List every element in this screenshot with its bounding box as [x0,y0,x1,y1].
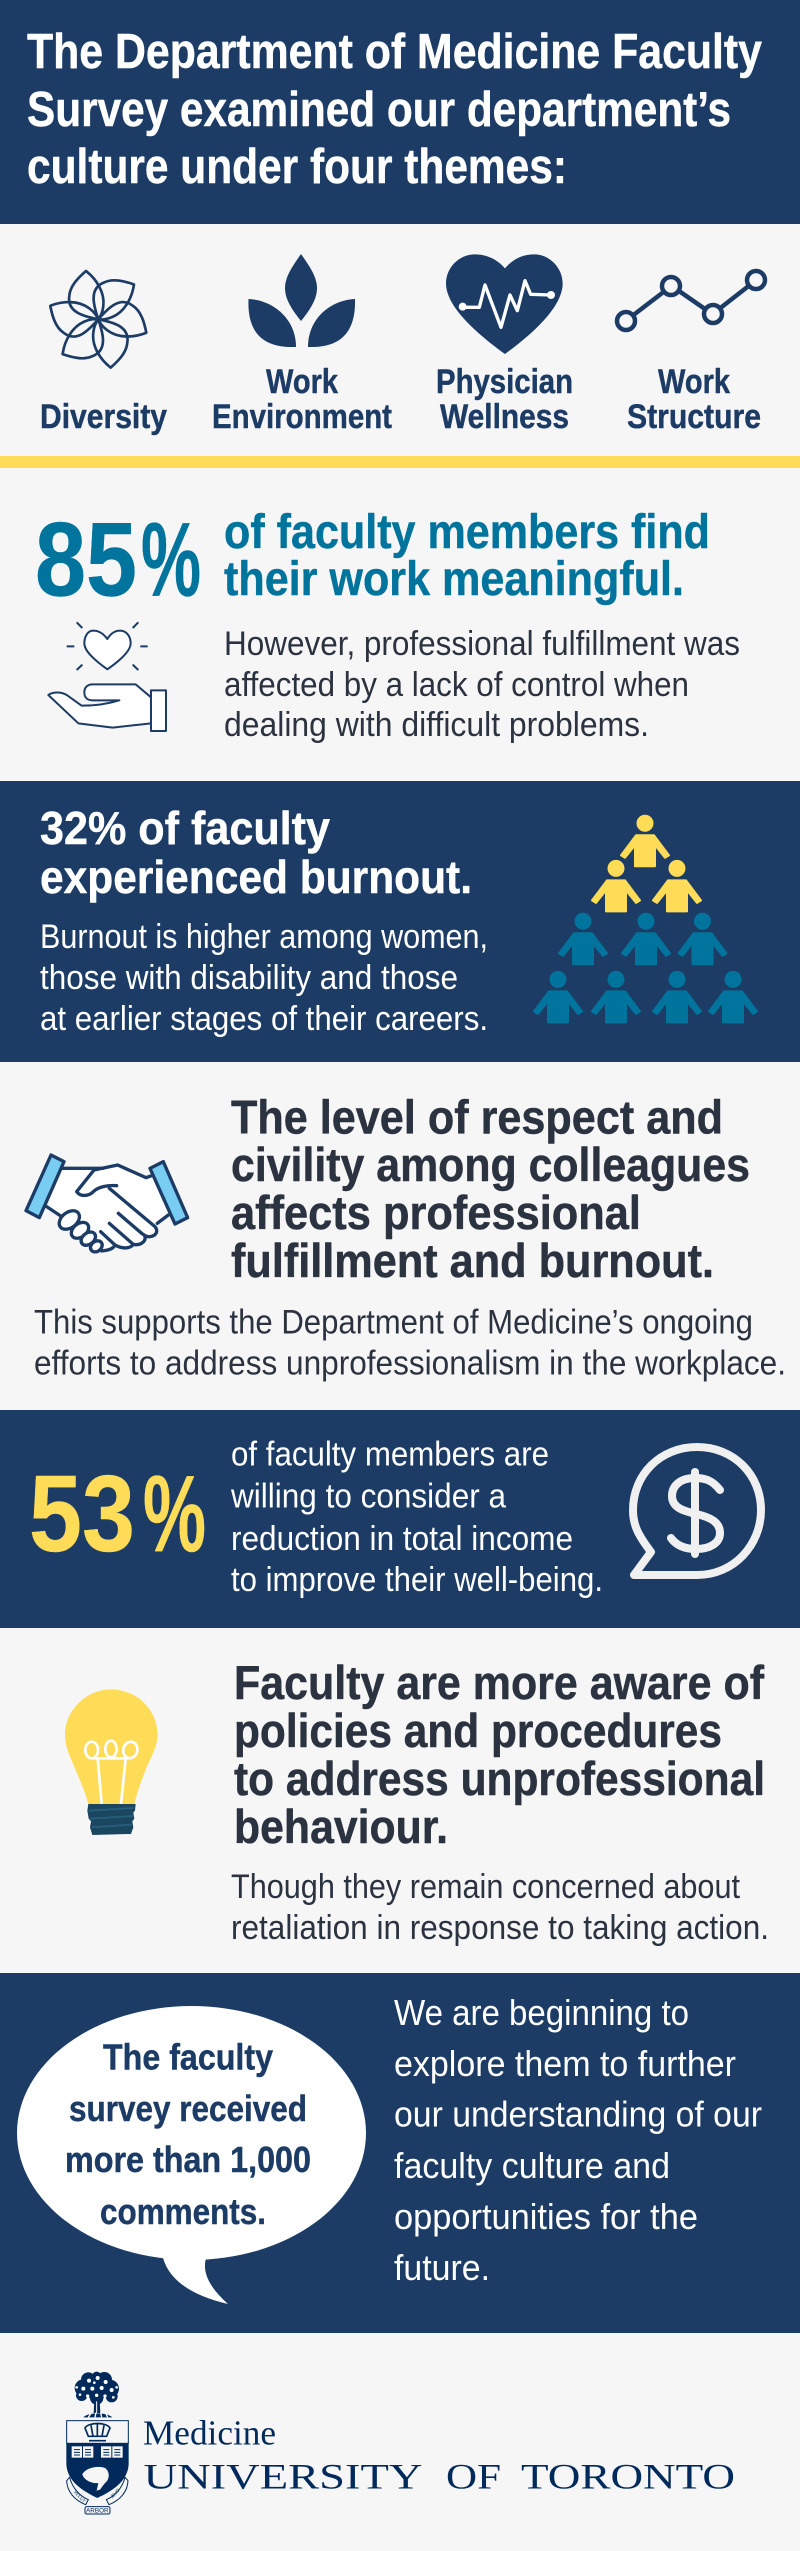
label: Physician Wellness [436,363,573,436]
icon: work structure line graph [617,271,765,330]
icon: work environment leaves [248,254,355,347]
label: Physician Wellness: Wellness [440,398,569,436]
heading: their work meaningful. [224,553,684,606]
tree [75,2372,119,2417]
wordmark: Medicine [143,2414,276,2452]
stat: 85%: % [141,502,201,618]
heading [224,506,710,606]
heading [231,1090,750,1287]
callout text: survey received [69,2088,307,2129]
panel: header [0,0,800,224]
body text: Though they remain concerned about [231,1868,740,1906]
body text: reduction in total income [231,1520,573,1558]
body text: future. [394,2247,490,2288]
icon: university crest: ÆVO [109,2487,121,2499]
panel: respect and civility [26,1090,786,1382]
heading: 32% of faculty [40,802,330,854]
icon: diversity flower [42,270,155,369]
books [72,2446,123,2458]
icon: light bulb [65,1689,158,1835]
callout text: more than 1,000 [65,2139,311,2180]
heading: experienced burnout. [40,851,472,903]
heading: policies and procedures [234,1704,722,1757]
panel: 53% income [0,1410,800,1628]
icon: university crest [66,2372,129,2514]
heading [40,802,472,903]
panel: 85% meaningful work [35,502,740,744]
body text: our understanding of our [394,2094,762,2134]
body text: opportunities for the [394,2196,698,2237]
body text: those with disability and those [40,959,458,997]
body text [40,918,488,1038]
panel: policies awareness [65,1656,769,1947]
panel: comments [0,1973,800,2333]
label: Work Structure [627,363,761,436]
heading [234,1656,765,1853]
title: culture under four themes: [27,140,567,194]
body text: dealing with difficult problems. [224,706,649,744]
body text: Burnout is higher among women, [40,918,488,956]
body text [224,625,740,744]
body text: We are beginning to [394,1992,689,2033]
stat: 53%: % [143,1453,206,1575]
body text: to improve their well-being. [231,1561,603,1599]
heading: behaviour. [234,1800,448,1853]
callout: speech bubble [17,2006,366,2304]
callout text: The faculty [103,2036,273,2078]
icon: pyramid of people [534,816,757,1022]
ribbons [67,2477,128,2514]
body text: affected by a lack of control when [224,666,689,704]
stat: 85%: 85 [35,502,137,618]
heading: Faculty are more aware of [234,1656,764,1709]
wordmark: OF [446,2456,501,2496]
heading: The level of respect and [231,1090,723,1144]
heading: affects professional [231,1186,641,1239]
panel: four themes [40,254,765,436]
body text [231,1868,769,1947]
body text: However, professional fulfillment was [224,625,740,663]
body text: This supports the Department of Medicine’s ongoing [34,1304,753,1342]
label: Diversity: Diversity [40,398,167,436]
callout text: comments. [100,2191,266,2232]
wordmark: TORONTO [521,2456,735,2496]
icon: dollar speech bubble [633,1447,761,1575]
beaver [82,2467,109,2491]
body text [230,1436,603,1599]
label: Work Structure: Work [658,363,730,401]
icon: physician wellness heart [446,254,563,354]
stat: 53%: 53 [29,1453,135,1575]
wordmark: UNIVERSITY [144,2456,422,2496]
label: Work Environment: Environment [212,398,392,436]
icon: handshake [26,1155,188,1254]
body text: of faculty members are [231,1436,549,1474]
label: Work Environment: Work [266,363,338,401]
icon: university crest: ARBOR [86,2507,109,2514]
heading: fulfillment and burnout. [231,1234,714,1287]
wordmark [143,2414,735,2496]
callout text [65,2036,311,2232]
stat: 53% [29,1453,206,1575]
body text: at earlier stages of their careers. [40,1000,488,1038]
label: Work Structure: Structure [627,398,761,436]
body text: willing to consider a [230,1478,506,1516]
crown [85,2423,110,2441]
panel: burnout [0,781,800,1062]
label: Physician Wellness: Physician [436,363,573,401]
body text [34,1304,786,1382]
body text: retaliation in response to taking action. [231,1909,769,1947]
icon: university crest: VELUT [73,2489,86,2504]
icon: hand holding heart [48,622,166,731]
body text [394,1992,762,2288]
body text: faculty culture and [394,2145,670,2186]
title [27,25,762,194]
heading: civility among colleagues [231,1138,750,1191]
body text: explore them to further [394,2043,736,2084]
heading: of faculty members find [224,506,710,559]
label: Work Environment [212,363,392,436]
panel: logo footer [66,2372,735,2514]
